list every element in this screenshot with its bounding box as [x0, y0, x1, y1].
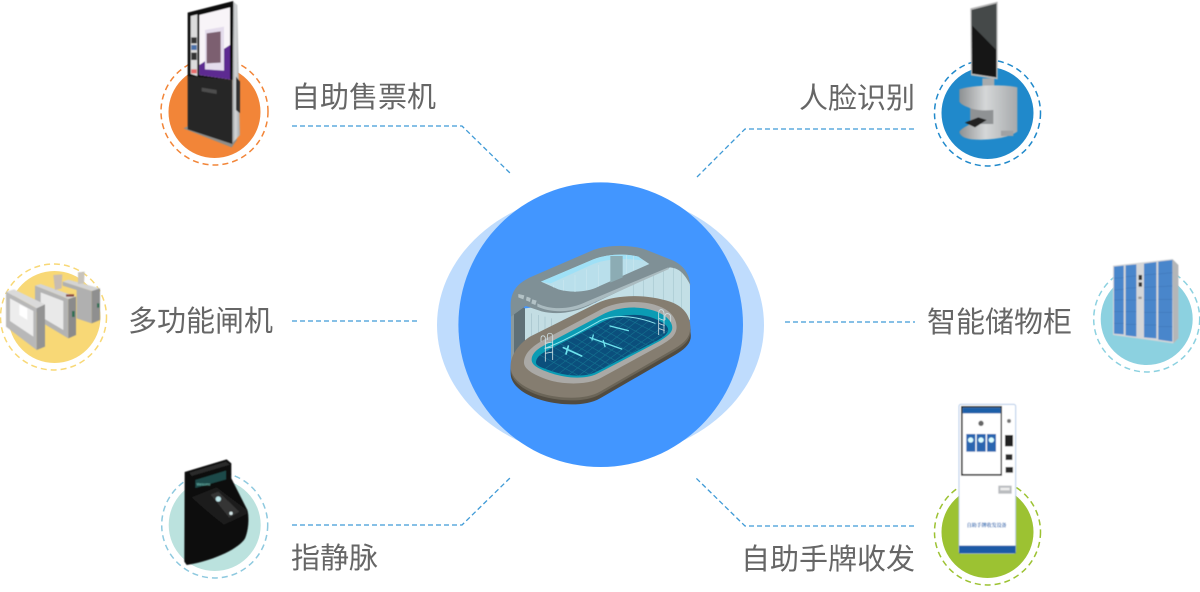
circle orange	[168, 66, 260, 158]
pool water highlights	[545, 317, 655, 356]
hub back ellipse	[437, 191, 764, 459]
circle green	[942, 486, 1034, 578]
icon: turnstile gates	[6, 272, 100, 350]
icon: face recognition terminal	[959, 2, 1017, 140]
connector: ticket machine	[292, 126, 512, 175]
connector: gate	[292, 320, 420, 322]
left ladder	[541, 333, 553, 362]
circle yellow	[8, 271, 100, 363]
roof highlight stripe	[537, 267, 669, 311]
circle mint	[169, 479, 261, 571]
icon: finger vein reader	[184, 459, 248, 565]
pool base	[511, 303, 691, 404]
icon: finger vein reader: Welcome	[197, 482, 211, 486]
skylight far band	[541, 255, 643, 283]
pool base mid layer	[511, 299, 691, 400]
right ladder	[659, 310, 671, 335]
pool water floor	[536, 315, 668, 376]
item: multi-function gate	[0, 264, 273, 370]
hub main circle	[458, 182, 743, 467]
icon: wristband kiosk: 自助手牌收发设备	[967, 522, 1007, 529]
item: smart locker	[927, 259, 1200, 372]
label: 指静脉	[291, 542, 378, 575]
roof	[511, 246, 690, 317]
icon: indoor swimming pool	[511, 246, 691, 404]
middle gate	[35, 284, 76, 299]
roof vents	[518, 294, 537, 305]
label: 自助售票机	[291, 81, 436, 114]
item: wristband dispenser	[741, 404, 1040, 585]
skylight	[541, 255, 649, 292]
item: face recognition	[799, 2, 1040, 166]
label: 智能储物柜	[927, 306, 1072, 339]
rear gate	[63, 280, 100, 291]
gate screens	[53, 274, 62, 290]
connector: locker	[785, 321, 915, 323]
pool tile grid	[540, 316, 668, 376]
label: 多功能闸机	[128, 305, 273, 338]
pool rim	[524, 302, 677, 383]
left glass	[525, 300, 597, 347]
connector: wristband dispenser	[696, 478, 914, 526]
label: 自助手牌收发	[741, 543, 915, 576]
back glass	[590, 265, 690, 320]
label: 人脸识别	[799, 82, 915, 115]
left pillar	[511, 302, 525, 362]
pool wall	[532, 308, 672, 378]
circle blue	[942, 67, 1034, 159]
front gate	[6, 289, 45, 308]
icon: locker cabinet	[1113, 259, 1178, 343]
icon: ticket kiosk	[183, 1, 240, 147]
pool deck	[511, 296, 690, 398]
icon: wristband kiosk	[959, 404, 1016, 553]
connector: face recognition	[697, 129, 914, 177]
connector: finger vein	[292, 477, 511, 525]
item: self-service ticket machine	[161, 1, 436, 165]
item: finger vein	[162, 459, 378, 578]
central hub	[437, 182, 764, 467]
circle teal	[1101, 273, 1193, 365]
skylight pillar	[610, 256, 623, 283]
